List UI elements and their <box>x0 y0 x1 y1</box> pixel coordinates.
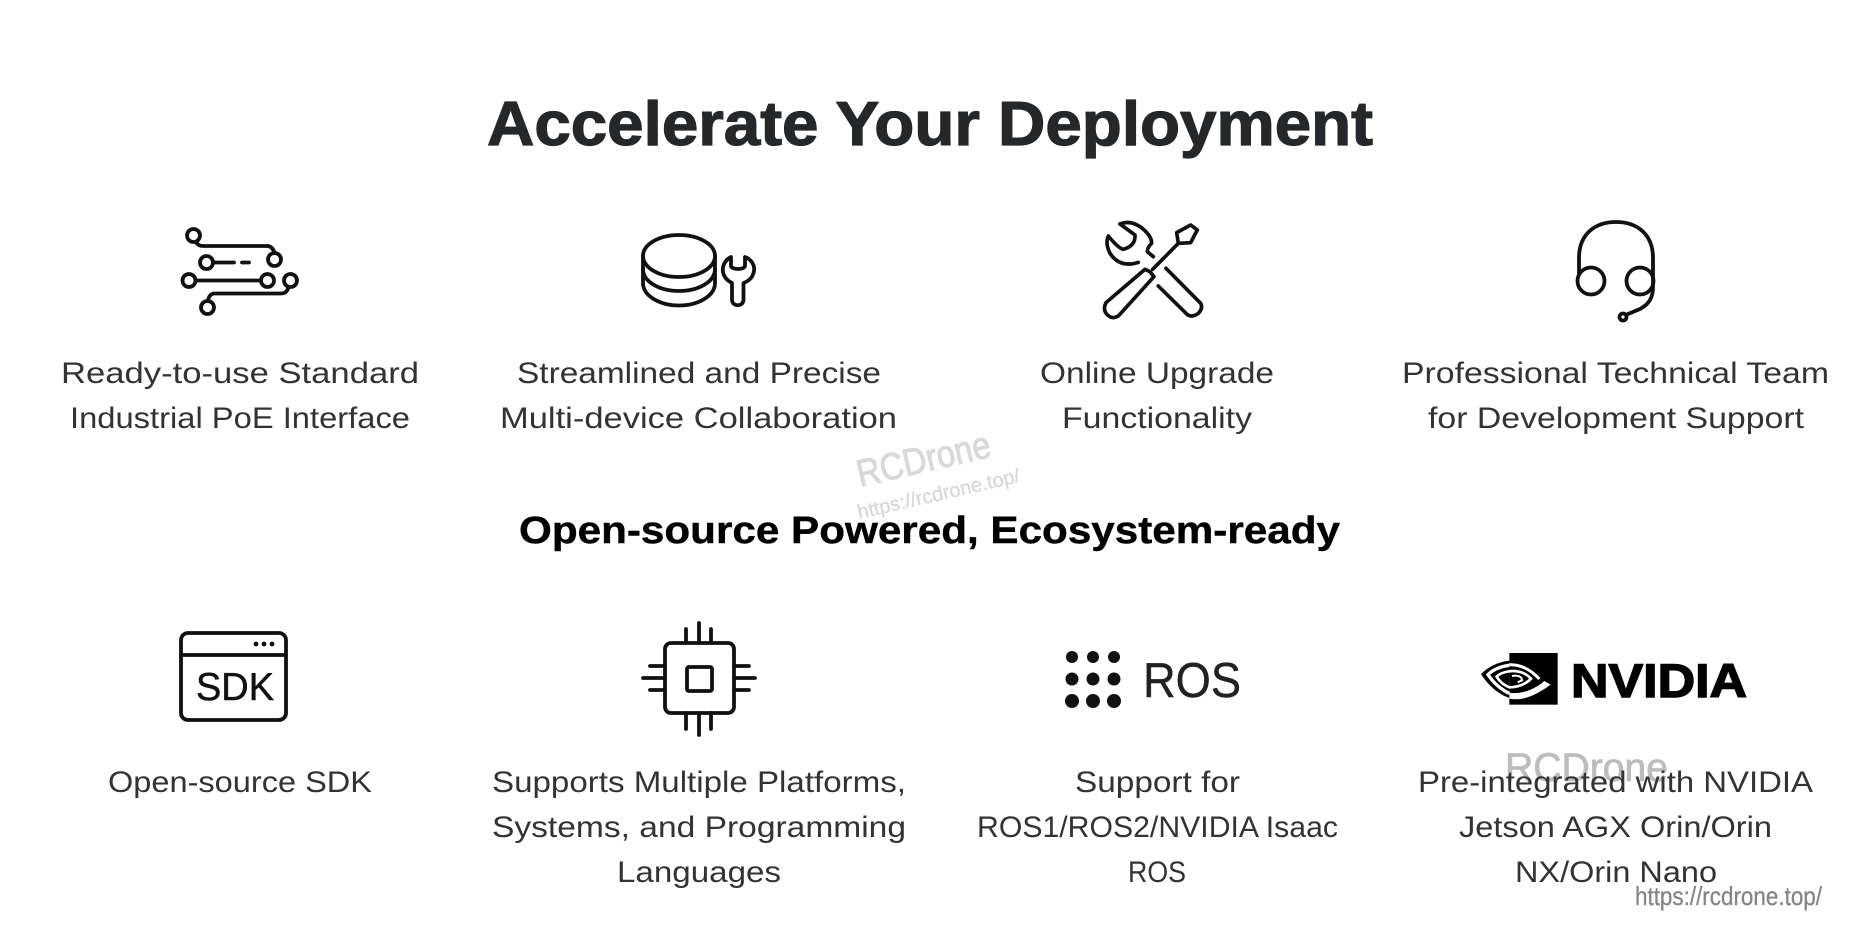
description <box>977 766 1338 889</box>
description: NX/Orin Nano <box>1515 856 1717 889</box>
feature: NVIDIA Jetson <box>1418 653 1823 911</box>
description: ROS1/ROS2/NVIDIA Isaac <box>977 811 1338 844</box>
feature: technical team <box>1402 222 1829 435</box>
description: Support for <box>1075 766 1240 799</box>
description: Industrial PoE Interface <box>70 402 410 435</box>
watermark: center <box>845 419 1022 524</box>
feature: multi-device collaboration <box>500 235 897 435</box>
description: ROS <box>1128 856 1186 889</box>
feature: standard PoE interface <box>61 229 419 435</box>
title: Accelerate Your Deployment <box>487 90 1373 159</box>
description: Open-source SDK <box>108 766 372 799</box>
feature: ROS <box>977 651 1338 889</box>
description <box>492 766 906 889</box>
icon: circuit traces <box>182 229 297 314</box>
icon: SDK window <box>181 633 286 720</box>
icon: NVIDIA logo: NVIDIA <box>1571 654 1747 707</box>
description <box>500 357 897 435</box>
description: Jetson AGX Orin/Orin <box>1459 811 1772 844</box>
feature: online upgrade <box>1040 222 1274 435</box>
description: Professional Technical Team <box>1402 357 1829 390</box>
icon: ROS logo: ROS <box>1143 654 1241 708</box>
description: Languages <box>617 856 781 889</box>
description: Systems, and Programming <box>492 811 906 844</box>
description <box>61 357 419 435</box>
description: Multi-device Collaboration <box>500 402 897 435</box>
icon: database and wrench <box>643 235 754 306</box>
description: Pre-integrated with NVIDIA <box>1418 766 1813 799</box>
description <box>1040 357 1274 435</box>
icon: wrench and screwdriver <box>1104 222 1202 318</box>
feature: multi-platform <box>492 623 906 889</box>
icon: headset <box>1578 222 1654 320</box>
icon: ROS logo <box>1065 651 1241 708</box>
watermark: center: https://rcdrone.top/ <box>855 465 1022 524</box>
description: for Development Support <box>1428 402 1805 435</box>
description <box>1402 357 1829 435</box>
description <box>1418 766 1813 889</box>
watermark: RCDrone: RCDrone <box>1505 746 1668 790</box>
description: Supports Multiple Platforms, <box>492 766 906 799</box>
icon: SDK window: SDK <box>196 666 274 709</box>
description: Streamlined and Precise <box>517 357 881 390</box>
description: Functionality <box>1062 402 1252 435</box>
icon: NVIDIA logo <box>1481 653 1747 707</box>
watermark: center: RCDrone <box>853 424 995 496</box>
description: Ready-to-use Standard <box>61 357 419 390</box>
section heading: Open-source Powered, Ecosystem-ready <box>519 510 1340 552</box>
watermark: URL: https://rcdrone.top/ <box>1635 881 1823 911</box>
icon: chip <box>643 623 755 735</box>
description: Online Upgrade <box>1040 357 1274 390</box>
feature: SDK <box>108 633 372 799</box>
